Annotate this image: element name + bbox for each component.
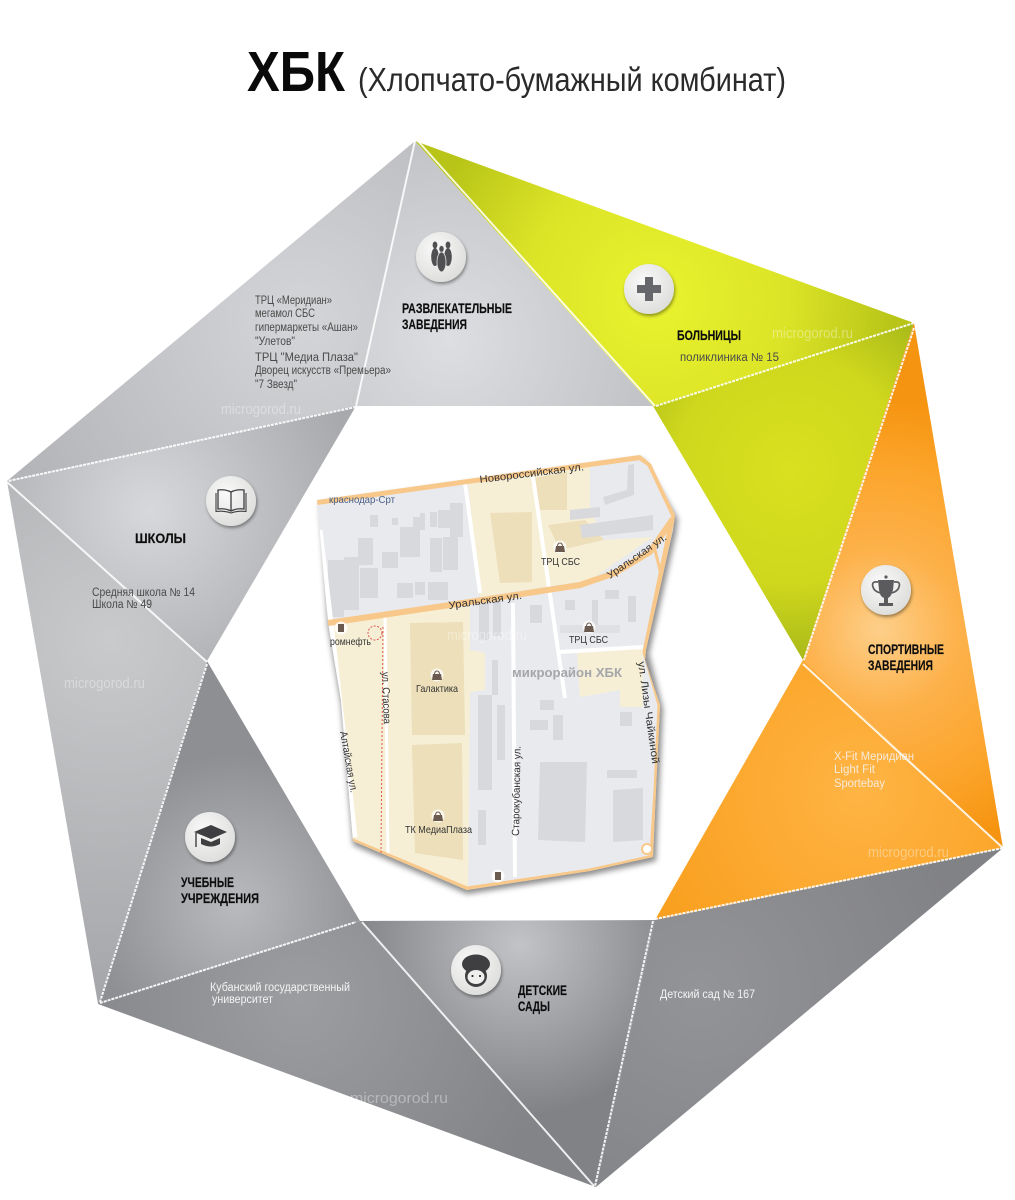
list: sports bbox=[834, 751, 914, 790]
panel: hospitals bbox=[415, 141, 914, 660]
list: schools: Школа № 49 bbox=[92, 599, 152, 611]
map labels: Новороссийская ул. bbox=[479, 461, 585, 486]
heading: entertainment: ЗАВЕДЕНИЯ bbox=[402, 317, 467, 332]
panel: kindergartens bbox=[360, 848, 1003, 1187]
map labels bbox=[329, 461, 669, 836]
watermark: microgorod.ru bbox=[772, 325, 853, 342]
map labels: краснодар-Срт bbox=[329, 494, 395, 506]
heading: kindergartens: САДЫ bbox=[518, 999, 550, 1014]
map labels: ул. Лизы Чайкиной bbox=[635, 661, 661, 765]
heading: educational institutions: УЧЕБНЫЕ bbox=[181, 875, 234, 890]
heading: entertainment bbox=[402, 301, 512, 332]
map: district bbox=[310, 450, 685, 895]
icon: graduation cap bbox=[185, 812, 235, 862]
heading: sports: СПОРТИВНЫЕ bbox=[868, 642, 944, 657]
list: hospitals: поликлиника № 15 bbox=[680, 352, 779, 364]
panel: educational institutions bbox=[98, 661, 596, 1187]
map pins bbox=[334, 540, 596, 882]
icon: child face bbox=[451, 945, 501, 995]
icon: medical cross bbox=[624, 264, 674, 314]
icon: bowling pins bbox=[416, 232, 466, 282]
map labels: ромнефть bbox=[330, 636, 371, 648]
list: sports: Light Fit bbox=[834, 764, 876, 776]
map labels: ТРЦ СБС bbox=[541, 556, 580, 568]
title bbox=[247, 40, 786, 104]
watermark: microgorod.ru bbox=[64, 675, 145, 692]
map labels: microgorod.ru bbox=[447, 627, 527, 644]
watermark: microgorod.ru bbox=[868, 844, 949, 861]
list: entertainment: ТРЦ "Медиа Плаза" bbox=[255, 352, 358, 364]
heading: kindergartens: ДЕТСКИЕ bbox=[518, 983, 567, 998]
heading: educational institutions bbox=[181, 875, 259, 906]
map labels: Уральская ул. bbox=[448, 590, 523, 612]
panel: sports bbox=[655, 323, 1003, 920]
list: educational institutions: университет bbox=[212, 994, 274, 1006]
list: entertainment: мегамол СБС bbox=[255, 308, 315, 320]
list: sports: Sportebay bbox=[834, 778, 885, 790]
list: sports: X-Fit Меридиан bbox=[834, 751, 914, 763]
list: educational institutions bbox=[210, 982, 350, 1006]
list: entertainment bbox=[255, 295, 391, 391]
watermark: microgorod.ru bbox=[350, 1090, 448, 1107]
map labels: ТК МедиаПлаза bbox=[405, 824, 472, 836]
list: schools bbox=[92, 587, 196, 611]
list: kindergartens: Детский сад № 167 bbox=[660, 989, 755, 1001]
panel: schools bbox=[7, 406, 356, 1004]
map labels: Уральская ул. bbox=[605, 531, 669, 581]
heading: sports: ЗАВЕДЕНИЯ bbox=[868, 658, 933, 673]
map labels: ТРЦ СБС bbox=[569, 634, 608, 646]
panel: entertainment bbox=[7, 141, 655, 481]
list: entertainment: гипермаркеты «Ашан» bbox=[255, 322, 358, 334]
heading: educational institutions: УЧРЕЖДЕНИЯ bbox=[181, 891, 259, 906]
map labels: микрорайон ХБК bbox=[512, 665, 622, 680]
map labels: Алтайская ул. bbox=[337, 730, 360, 794]
list: schools: Средняя школа № 14 bbox=[92, 587, 196, 599]
heading: hospitals: БОЛЬНИЦЫ bbox=[677, 328, 741, 343]
title: (Хлопчато-бумажный комбинат) bbox=[358, 61, 786, 98]
heading: schools: ШКОЛЫ bbox=[135, 531, 186, 546]
heading: kindergartens bbox=[518, 983, 567, 1014]
map labels: Старокубанская ул. bbox=[510, 746, 524, 836]
list: entertainment: ТРЦ «Меридиан» bbox=[255, 295, 332, 307]
heading: sports bbox=[868, 642, 944, 673]
title: ХБК bbox=[247, 40, 345, 104]
heading: entertainment: РАЗВЛЕКАТЕЛЬНЫЕ bbox=[402, 301, 512, 316]
watermark: microgorod.ru bbox=[221, 401, 301, 418]
icon: trophy bbox=[861, 565, 911, 615]
list: entertainment: "7 Звезд" bbox=[255, 379, 297, 391]
list: educational institutions: Кубанский государственный bbox=[210, 982, 350, 994]
list: entertainment: "Улетов" bbox=[255, 336, 295, 348]
list: entertainment: Дворец искусств «Премьера» bbox=[255, 365, 391, 377]
map labels: Галактика bbox=[416, 683, 458, 695]
map labels: ул. Стасова bbox=[379, 672, 393, 724]
icon: open book bbox=[206, 476, 256, 526]
